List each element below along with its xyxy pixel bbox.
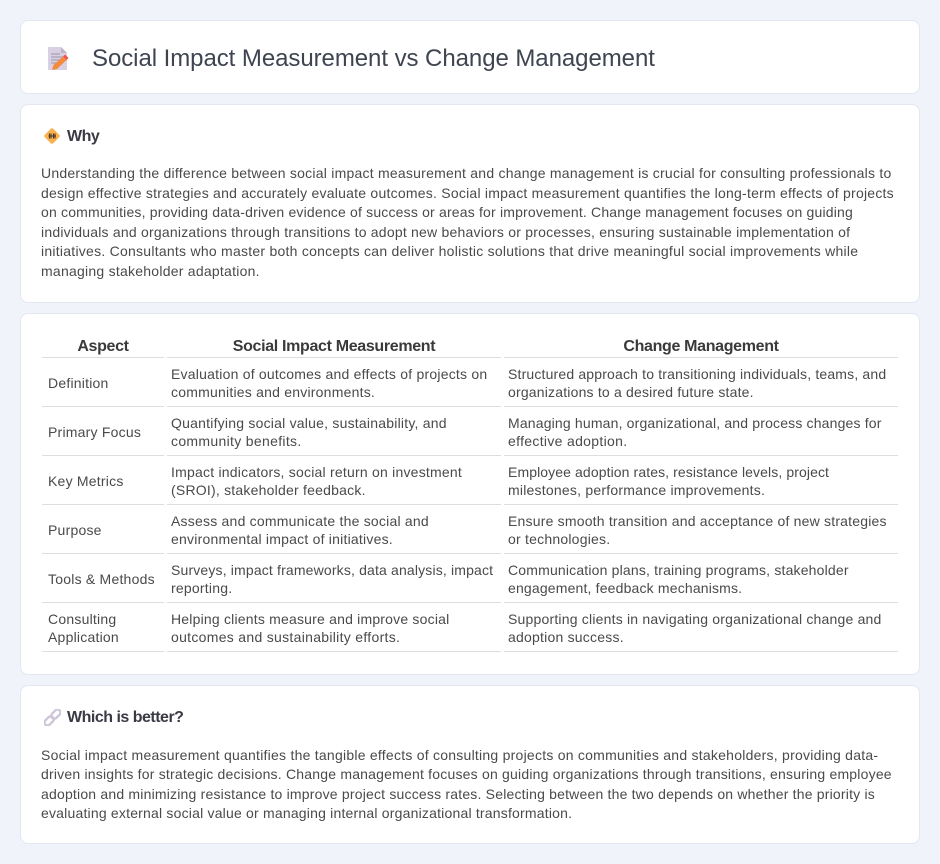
row: tools and methods: Tools & Methods xyxy=(48,571,155,587)
table header: Aspect xyxy=(77,338,129,355)
why text block: individuals and organizations through transitions to adopt new behaviors or processes, ensuring sustainable implementation of xyxy=(41,224,850,240)
row: key metrics: Impact indicators, social return on investment xyxy=(171,464,462,480)
icon: diamond warning sign xyxy=(44,128,60,144)
row: consulting application xyxy=(42,611,898,652)
why text block: design effective strategies and accurately evaluate outcomes. Social impact measurement quantifies the long-term effects of projects xyxy=(41,185,894,201)
row: definition xyxy=(42,366,898,407)
why text block: initiatives. Consultants who master both concepts can deliver holistic solutions that drive meaningful social improvements while xyxy=(41,243,858,259)
row: tools and methods: Surveys, impact frameworks, data analysis, impact xyxy=(171,562,493,578)
row: consulting application: Supporting clients in navigating organizational change and xyxy=(508,611,882,627)
row: primary focus: community benefits. xyxy=(171,433,302,449)
row: definition: Structured approach to transitioning individuals, teams, and xyxy=(508,366,886,382)
row: purpose: Purpose xyxy=(48,522,102,538)
table header: Change Management xyxy=(623,338,779,355)
which is better text block: evaluating external social value or managing internal organizational transformation. xyxy=(41,805,572,821)
row: key metrics: Employee adoption rates, resistance levels, project xyxy=(508,464,829,480)
row: purpose: environmental impact of initiatives. xyxy=(171,531,393,547)
row: definition: organizations to a desired future state. xyxy=(508,384,754,400)
row: consulting application: Consulting xyxy=(48,611,116,627)
row: tools and methods xyxy=(42,562,898,603)
header card xyxy=(20,20,920,94)
row: definition: Definition xyxy=(48,375,109,391)
panel: why xyxy=(20,104,920,303)
row: primary focus: Managing human, organizational, and process changes for xyxy=(508,415,882,431)
row: primary focus xyxy=(42,415,898,456)
row: purpose xyxy=(42,513,898,554)
which is better text block xyxy=(41,747,892,821)
icon: document with pencil xyxy=(48,47,68,70)
heading: which is better: Which is better? xyxy=(67,709,183,726)
row: purpose: Assess and communicate the social and xyxy=(171,513,429,529)
row: consulting application: Helping clients measure and improve social xyxy=(171,611,449,627)
why text block: on communities, providing data-driven evidence of success or areas for improvement. Change management focuses on guiding xyxy=(41,204,853,220)
row: key metrics: (SROI), stakeholder feedback. xyxy=(171,482,366,498)
row: purpose: Ensure smooth transition and acceptance of new strategies xyxy=(508,513,887,529)
panel: which is better xyxy=(20,685,920,844)
row: definition: communities and environments. xyxy=(171,384,375,400)
row: definition: Evaluation of outcomes and effects of projects on xyxy=(171,366,487,382)
row: purpose: or technologies. xyxy=(508,531,610,547)
title: Social Impact Measurement vs Change Management xyxy=(92,45,655,72)
row: tools and methods: Communication plans, training programs, stakeholder xyxy=(508,562,849,578)
table header xyxy=(42,338,898,358)
why text block xyxy=(41,165,894,279)
why text block: Understanding the difference between social impact measurement and change management is crucial for consulting professionals to xyxy=(41,165,891,181)
why text block: managing stakeholder adaptation. xyxy=(41,263,260,279)
row: primary focus: Quantifying social value, sustainability, and xyxy=(171,415,447,431)
row: primary focus: effective adoption. xyxy=(508,433,627,449)
row: key metrics: milestones, performance improvements. xyxy=(508,482,765,498)
row: consulting application: outcomes and sustainability efforts. xyxy=(171,629,400,645)
which is better text block: adoption and minimizing resistance to improve project success rates. Selecting between the two depends on whether the priority is xyxy=(41,786,875,802)
row: consulting application: Application xyxy=(48,629,119,645)
row: tools and methods: reporting. xyxy=(171,580,232,596)
row: consulting application: adoption success. xyxy=(508,629,624,645)
row: key metrics: Key Metrics xyxy=(48,473,124,489)
row: tools and methods: engagement, feedback mechanisms. xyxy=(508,580,742,596)
row: key metrics xyxy=(42,464,898,505)
which is better text block: driven insights for strategic decisions. Change management focuses on guiding organizations through transitions, ensuring employee xyxy=(41,766,892,782)
which is better text block: Social impact measurement quantifies the tangible effects of consulting projects on communities and stakeholders, providing data- xyxy=(41,747,878,763)
table header: Social Impact Measurement xyxy=(233,338,435,355)
heading: why: Why xyxy=(67,128,99,145)
icon: chain link xyxy=(44,709,61,726)
panel: comparison table xyxy=(20,313,920,675)
row: primary focus: Primary Focus xyxy=(48,424,141,440)
